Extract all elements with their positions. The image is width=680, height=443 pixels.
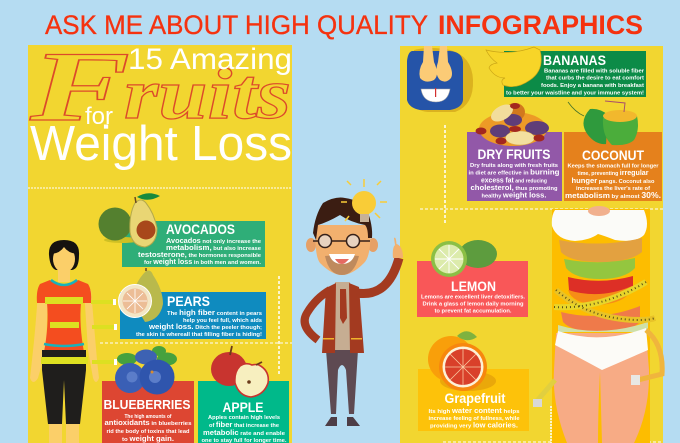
man shoes (325, 417, 360, 426)
figure: man with light bulb (305, 179, 403, 426)
icon: pear (118, 268, 163, 322)
panel: apple (198, 346, 289, 443)
icon: blueberries (115, 346, 177, 394)
icon: dried fruit pile (476, 101, 549, 146)
bananas box (504, 51, 646, 97)
pears text (136, 308, 262, 338)
coconut text: increases the liver's rate of (576, 186, 650, 192)
woman leggings (42, 350, 86, 424)
heading: Weight Loss: Weight Loss (30, 117, 292, 171)
bananas text: that curbs the desire to eat comfort (546, 76, 644, 82)
man jacket (322, 283, 364, 353)
grapefruit text: increase feeling of fullness, while (428, 416, 520, 422)
icon: bathroom scale (407, 46, 473, 112)
avocados text: Avocados not only increase the (166, 238, 261, 245)
coconut text: hunger pangs. Coconut also (572, 176, 655, 185)
hips and thighs (554, 333, 649, 443)
coconut heading: COCONUT (582, 148, 645, 163)
grapefruit text: providing very low calories. (430, 422, 518, 430)
icon: avocado (98, 193, 160, 247)
lemon text: Lemons are excellent liver detoxifiers. (421, 294, 525, 300)
woman top (37, 280, 91, 355)
white briefs (555, 328, 648, 370)
bananas text: foods. Enjoy a banana with breakfast (541, 83, 644, 89)
icon: coconut (568, 101, 638, 145)
man raised hand (393, 238, 403, 258)
avocados box (122, 221, 265, 267)
heading: Fruits script: F (29, 31, 130, 142)
pears box (120, 292, 266, 339)
bananas heading: BANANAS (543, 53, 606, 68)
pears text: help you feel full, which aids (183, 318, 262, 324)
dry fruits text: cholesterol, thus promoting (470, 183, 558, 192)
man left arm (305, 290, 330, 340)
coconut text: time, preventing irregular (578, 168, 649, 177)
grapefruit box (418, 369, 529, 431)
title: ASK ME ABOUT HIGH QUALITY (45, 10, 428, 40)
panel: coconut (564, 101, 662, 201)
pears text: The high fiber content in pears (167, 308, 262, 317)
figure: waist made of fruit slices with tape (533, 206, 662, 443)
avocados text: testosterone, the hormones responsible (138, 250, 261, 259)
blueberries text: rid the body of toxins that lead (106, 429, 190, 435)
woman head (49, 240, 79, 270)
measuring tape bands (41, 297, 117, 365)
panel: pears (118, 268, 266, 339)
lemon text (421, 294, 525, 314)
panel: lemon (417, 240, 528, 317)
apple text: of fiber that increase the (209, 420, 279, 429)
coconut text: Keeps the stomach full for longer (568, 164, 659, 170)
blueberries text: antioxidants in blueberries (104, 420, 192, 427)
heading: for: for (85, 103, 113, 130)
lemon heading: LEMON (451, 278, 496, 294)
apple text: metabolic rate and enable (203, 430, 285, 437)
icon: bananas (486, 47, 541, 87)
icon: grapefruit (428, 331, 496, 391)
grapefruit text (428, 408, 520, 430)
man tie (340, 289, 347, 324)
dry fruits heading: DRY FRUITS (478, 147, 550, 162)
apple text (202, 415, 287, 443)
heading: 15 Amazing: 15 Amazing (128, 43, 292, 76)
dry fruits text (468, 163, 560, 200)
man glasses (313, 234, 370, 248)
man shirt (335, 282, 350, 350)
man right arm (357, 258, 399, 294)
blueberries heading: BLUEBERRIES (104, 397, 191, 412)
grapefruit heading: Grapefruit (444, 390, 506, 406)
orange backdrop strip (552, 209, 650, 443)
lemon text: Drink a glass of lemon daily morning (422, 302, 524, 308)
title: INFOGRAPHICS (438, 10, 643, 40)
man head (306, 238, 316, 252)
avocados text: for weight loss in both men and women. (144, 259, 261, 266)
panel: avocados (98, 193, 265, 267)
man legs (326, 350, 358, 414)
panel: bananas (486, 47, 646, 97)
dry fruits text: Dry fruits along with fresh fruits (470, 163, 558, 169)
bananas text: Bananas are filled with soluble fiber (544, 68, 645, 74)
icon: light bulb (341, 179, 387, 222)
panel: grapefruit (418, 331, 529, 431)
grapefruit text: Its high water content helps (428, 408, 520, 415)
dry fruits text: in diet are effective in burning (468, 168, 560, 176)
man smile (329, 254, 355, 264)
avocados heading: AVOCADOS (166, 222, 235, 237)
panel: right yellow poster (400, 46, 663, 443)
lemon box (417, 261, 528, 317)
apple text: Apples contain high levels (208, 415, 280, 421)
woman legs and arms (30, 290, 99, 382)
heading: Fruits script: ruits (124, 54, 291, 134)
upper white shirt (552, 210, 647, 241)
coconut box (564, 132, 662, 201)
blueberries box (102, 381, 194, 443)
poster heading (29, 31, 292, 171)
apple heading: APPLE (222, 400, 264, 415)
pears text: weight loss. Ditch the peeler though; (148, 322, 262, 331)
coconut text: metabolism by almost 30%. (565, 191, 661, 200)
apple box (198, 381, 289, 443)
pears heading: PEARS (167, 293, 210, 309)
icon: apple (211, 346, 268, 397)
figure: woman with measuring tape (30, 240, 117, 443)
blueberries text: to weight gain. (122, 436, 174, 443)
panel: left yellow poster (28, 45, 292, 443)
heading: Fruits script (29, 31, 291, 142)
lemon text: to prevent fat accumulation. (434, 308, 512, 314)
coconut text (565, 164, 661, 200)
panel: dry fruits (467, 101, 562, 201)
blueberries text (104, 414, 192, 443)
bananas text: to better your waistline and your immune system! (506, 90, 644, 96)
dry fruits text: excess fat and reducing (481, 176, 548, 184)
title (45, 10, 643, 40)
bananas text (506, 68, 645, 96)
measuring tape (536, 282, 662, 402)
fruit slices (559, 238, 642, 262)
panel: blueberries (102, 346, 194, 443)
pears text: the skin is whereall that filling fiber is hiding! (136, 332, 262, 338)
dry fruits text: healthy weight loss. (482, 190, 546, 200)
icon: lemon (431, 240, 497, 277)
avocados text: metabolism, but also increase (166, 243, 261, 252)
avocados text (138, 238, 261, 266)
dry fruits box (467, 132, 562, 201)
blueberries text: The high amounts of (124, 414, 172, 420)
